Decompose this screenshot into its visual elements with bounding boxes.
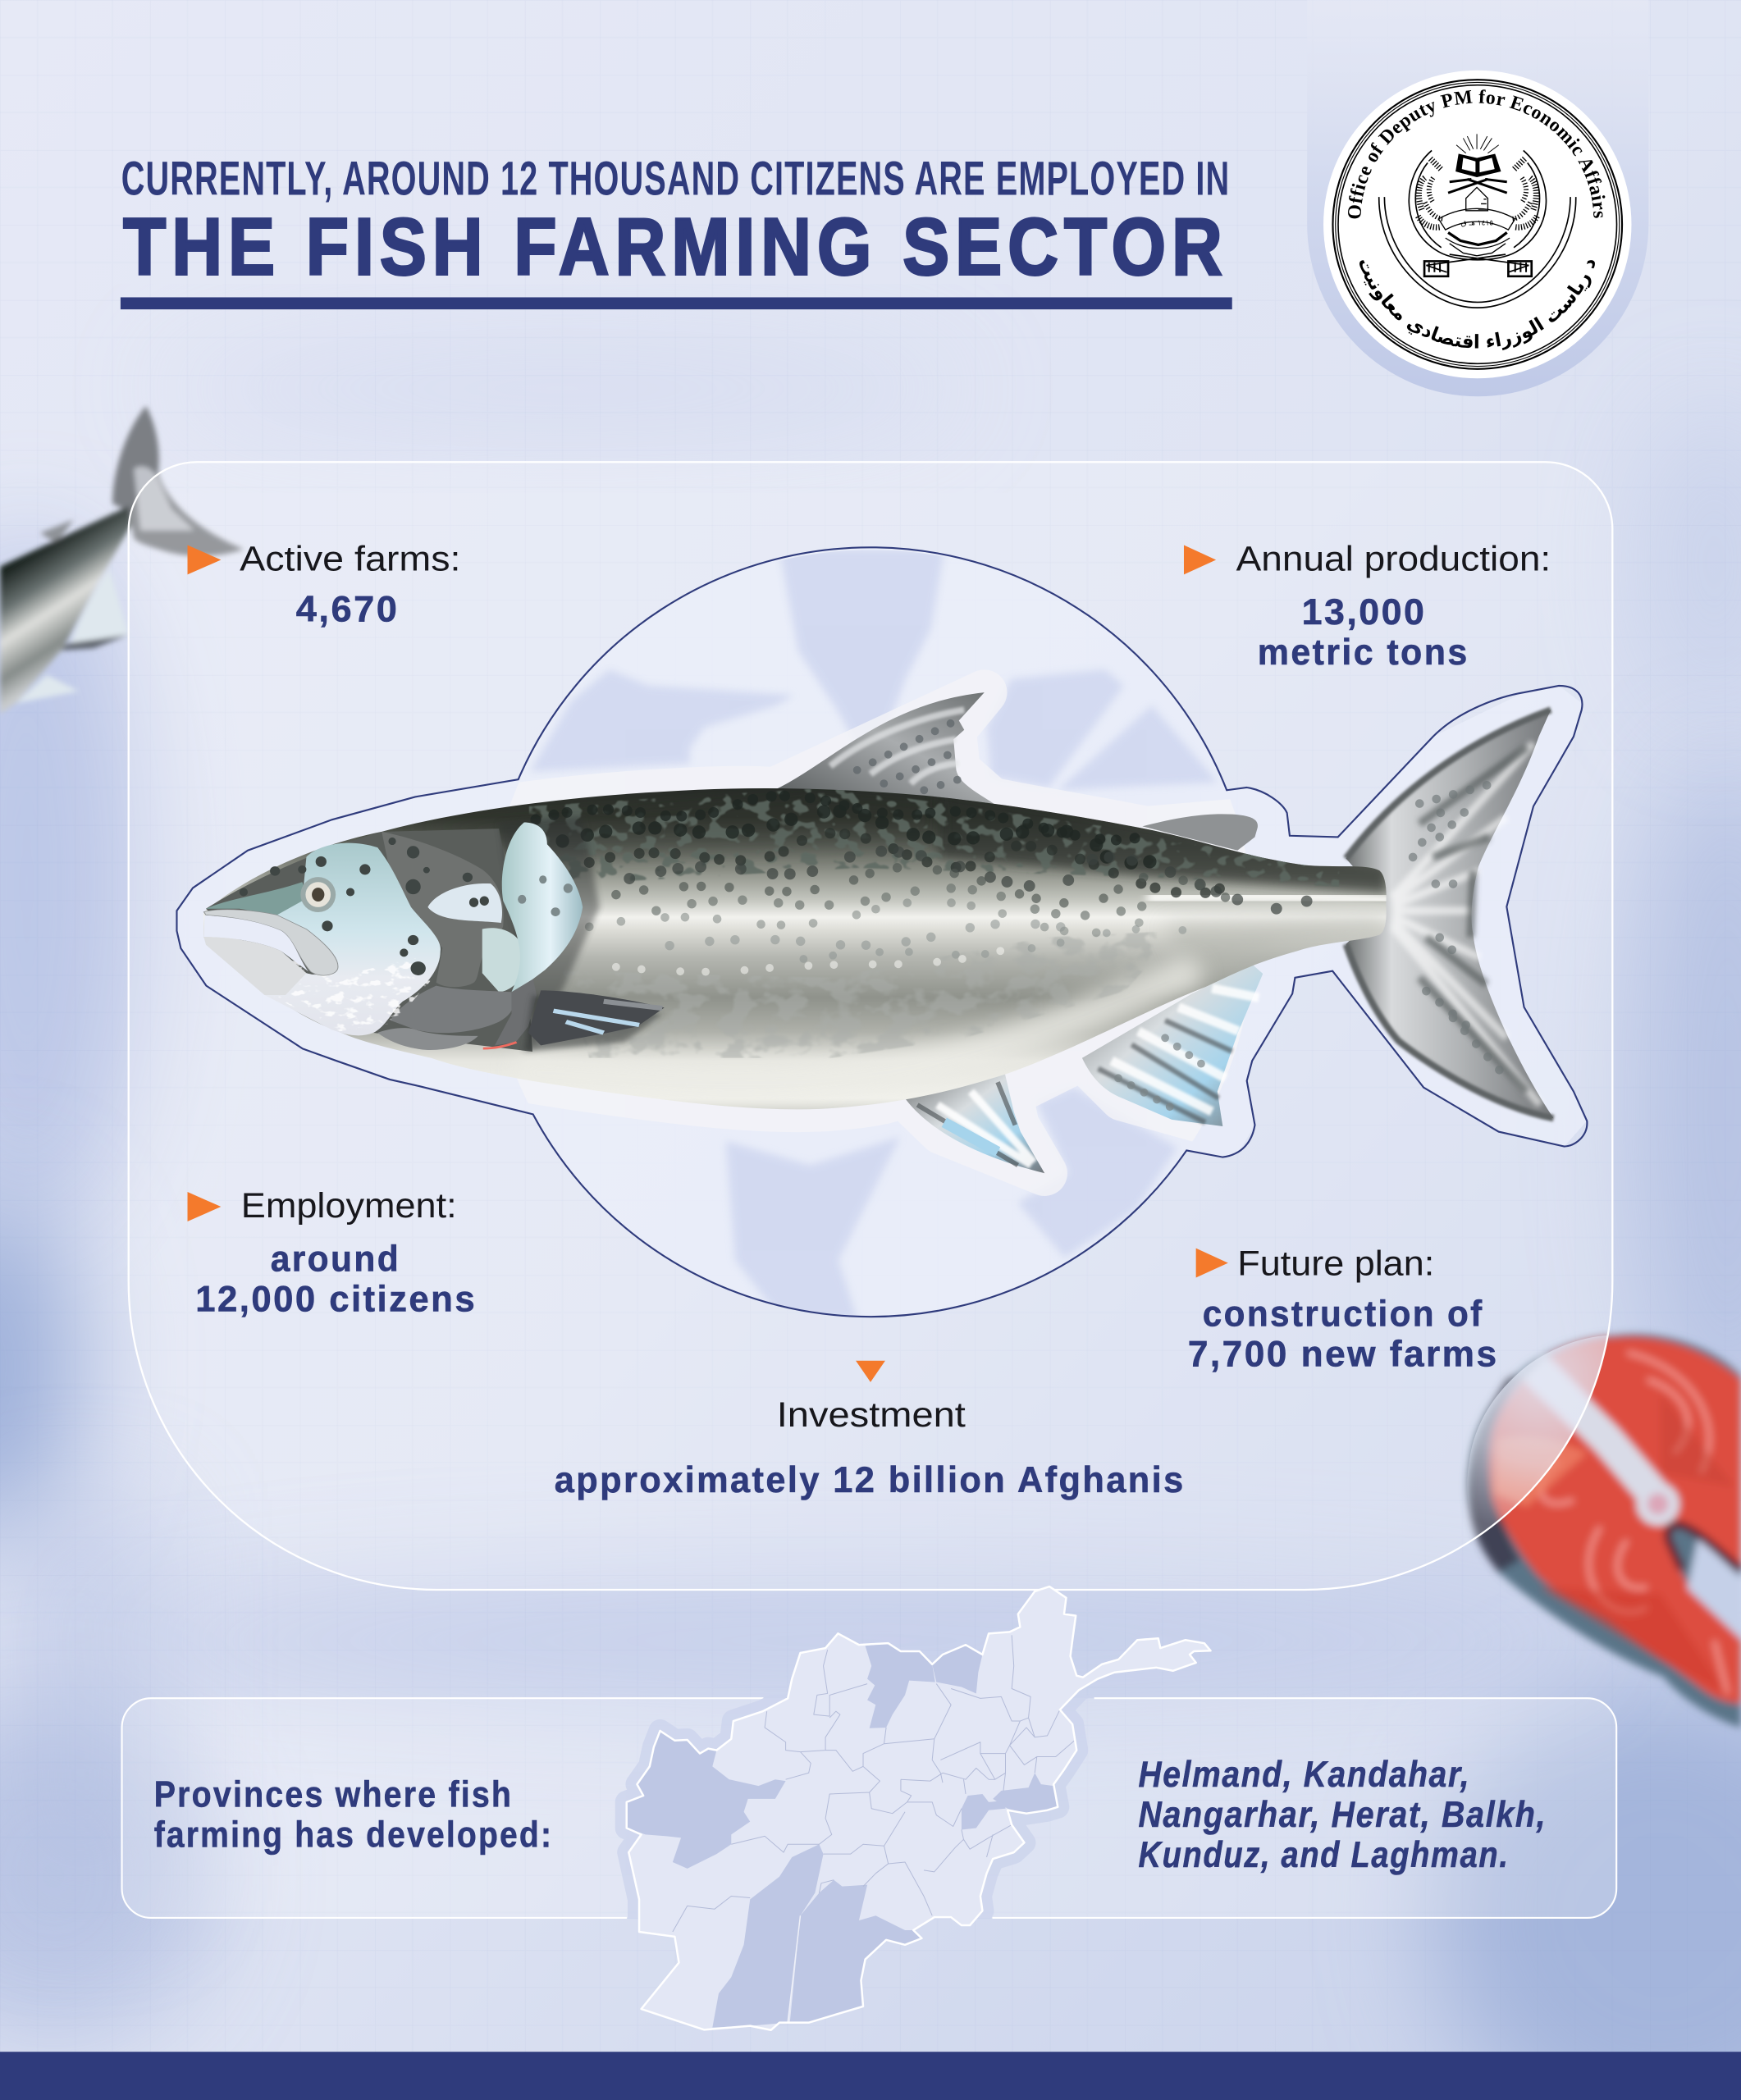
anal fin bbox=[1082, 965, 1263, 1126]
seal backdrop bbox=[1307, 0, 1648, 396]
label: Future plan: bbox=[1237, 1244, 1434, 1282]
value: approximately 12 billion Afghanis bbox=[555, 1460, 1186, 1500]
title bbox=[121, 153, 1232, 309]
arrow icon bbox=[188, 545, 221, 574]
provinces list: Helmand, Kandahar, bbox=[1138, 1755, 1470, 1795]
body dark blotches bbox=[529, 788, 1339, 887]
eye bbox=[300, 877, 336, 912]
value bbox=[1188, 1294, 1499, 1374]
label: Investment bbox=[777, 1395, 966, 1434]
upper jaw bbox=[203, 910, 338, 975]
gill plate highlight bbox=[427, 883, 502, 923]
head dark crown bbox=[206, 829, 532, 1052]
value: 4,670 bbox=[296, 590, 399, 630]
label: Annual production: bbox=[1236, 540, 1551, 578]
arrow icon bbox=[1184, 545, 1216, 574]
highlighted provinces bbox=[627, 1643, 1058, 2028]
gill plate dark bbox=[382, 832, 504, 987]
body spots bbox=[536, 796, 1313, 972]
provinces label bbox=[154, 1774, 553, 1855]
provinces list: Kunduz, and Laghman. bbox=[1138, 1835, 1510, 1875]
panel: main rounded card bbox=[129, 462, 1741, 1607]
provinces list bbox=[1138, 1755, 1547, 1875]
blurred fish top left bbox=[0, 406, 244, 714]
salmon illustration bbox=[188, 692, 1553, 1173]
stat: employment bbox=[188, 1186, 477, 1319]
fish head bbox=[203, 816, 665, 1052]
shoulder shade bbox=[499, 816, 600, 1048]
gill small lobe bbox=[482, 928, 525, 992]
cheek plate bbox=[203, 843, 441, 1035]
map outline bbox=[627, 1586, 1211, 2030]
tail fin bbox=[1346, 710, 1553, 1118]
fish body bbox=[203, 788, 1387, 1109]
seal arabic text: د ریاست الوزراء اقتصادي معاونیت bbox=[1359, 260, 1595, 351]
value bbox=[195, 1239, 477, 1319]
stat: annual production bbox=[1184, 540, 1551, 673]
body blotches lower bbox=[563, 931, 1178, 1058]
arrow icon bbox=[188, 1192, 221, 1221]
head spots bbox=[240, 838, 573, 975]
title line 2: THE FISH FARMING SECTOR bbox=[123, 201, 1228, 291]
lower throat lobe 2 bbox=[377, 1028, 478, 1050]
value bbox=[1258, 592, 1469, 673]
provinces label: Provinces where fish bbox=[154, 1774, 513, 1815]
pectoral shadow bbox=[524, 995, 662, 1052]
fish silhouette frame with circle bbox=[176, 547, 1587, 1319]
value: metric tons bbox=[1258, 632, 1469, 673]
map halo bbox=[627, 1586, 1211, 2030]
adipose fin bbox=[1142, 814, 1258, 851]
lower jaw bbox=[203, 937, 306, 995]
map of Afghanistan bbox=[627, 1586, 1211, 2030]
stat: future plan bbox=[1188, 1244, 1499, 1374]
arrow icon bbox=[856, 1361, 885, 1382]
seal english text: Office of Deputy PM for Economic Affairs bbox=[1348, 89, 1605, 218]
provinces label: farming has developed: bbox=[154, 1815, 553, 1855]
Helmand Kandahar divider bbox=[788, 1915, 800, 2023]
value: around bbox=[271, 1239, 400, 1279]
red gill mark bbox=[483, 1042, 517, 1048]
ghost fish pattern in circle bbox=[530, 549, 1218, 1319]
mouth gap bbox=[203, 915, 308, 971]
salmon steak bbox=[1467, 1334, 1741, 1728]
pectoral fin bbox=[528, 990, 665, 1045]
title rule bbox=[121, 297, 1232, 309]
provinces list: Nangarhar, Herat, Balkh, bbox=[1138, 1795, 1547, 1835]
white halo around fish bbox=[517, 670, 1245, 1196]
cheek texture bbox=[210, 942, 432, 1031]
dorsal fin bbox=[774, 692, 994, 804]
value: 12,000 citizens bbox=[195, 1279, 477, 1319]
seal emblem bbox=[1379, 134, 1576, 308]
map land bbox=[627, 1586, 1211, 2030]
value: 13,000 bbox=[1302, 592, 1426, 632]
seal inner lettering: ١٤١٥ هـ ق bbox=[1461, 219, 1493, 227]
arrow icon bbox=[1196, 1249, 1228, 1278]
title line 1: CURRENTLY, AROUND 12 THOUSAND CITIZENS ARE EMPLOYED IN bbox=[121, 153, 1230, 206]
label: Employment: bbox=[241, 1186, 457, 1225]
value: construction of bbox=[1203, 1294, 1484, 1334]
value: 7,700 new farms bbox=[1188, 1334, 1499, 1374]
stat: investment bbox=[555, 1361, 1186, 1500]
ventral fin bbox=[902, 1071, 1044, 1173]
lower throat lobe bbox=[390, 986, 514, 1033]
snout teal band bbox=[206, 882, 311, 915]
stat: active farms bbox=[188, 540, 461, 630]
label: Active farms: bbox=[240, 540, 461, 578]
pale shoulder plate bbox=[502, 822, 583, 992]
panel: provinces bbox=[122, 1698, 1616, 1918]
footer bar bbox=[0, 2052, 1741, 2100]
pectoral base bbox=[495, 976, 537, 1045]
logo: office seal bbox=[1323, 71, 1631, 379]
province borders bbox=[673, 1635, 1075, 1932]
